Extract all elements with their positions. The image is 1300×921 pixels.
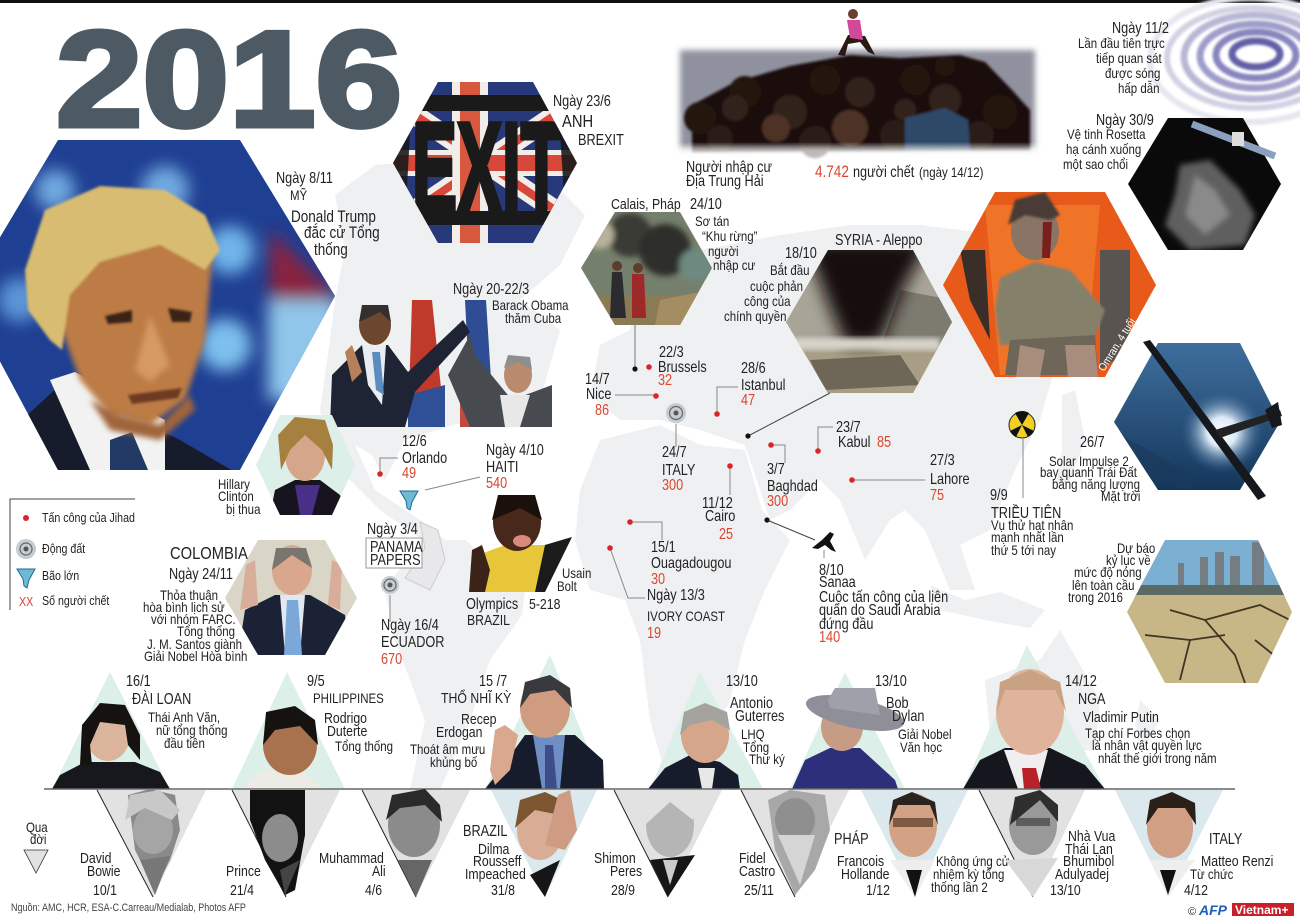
gravitational waves caption: tiếp quan sát — [1096, 50, 1162, 66]
panel: King Bhumibol triangle: Bhumibol — [1063, 853, 1114, 869]
event: Sanaa: đứng đầu — [819, 616, 873, 633]
event: Haiti storm: HAITI — [486, 459, 518, 476]
panel: migrants photo — [670, 50, 1045, 162]
legend: XX — [19, 594, 33, 609]
gravitational waves caption: được sóng — [1105, 65, 1160, 81]
event: North Korea nuclear test — [990, 411, 1073, 558]
event: Ecuador earthquake: 670 — [381, 651, 402, 668]
event: Ivory Coast — [607, 545, 725, 642]
event: Brussels: Brussels — [658, 359, 707, 376]
panel: Matteo Renzi triangle: 4/12 — [1184, 882, 1208, 898]
panel: Putin triangle: NGA — [1078, 691, 1106, 708]
event: Haiti storm: Ngày 4/10 — [486, 442, 544, 459]
event: North Korea nuclear test: TRIỀU TIÊN — [991, 504, 1061, 522]
Bolt captions: Olympics — [466, 596, 518, 613]
panel: Calais photo — [581, 212, 712, 325]
panel: Trump photo — [0, 140, 340, 475]
panel: Erdogan triangle: Thoát âm mưu — [410, 741, 485, 757]
panel: King Bhumibol triangle: 13/10 — [1050, 882, 1081, 898]
panel: Guterres triangle: LHQ — [741, 726, 765, 742]
event: Panama Papers: PANAMA — [370, 539, 423, 556]
panel: Omran photo — [943, 192, 1156, 377]
child held up — [838, 9, 875, 56]
Rosetta caption: Ngày 30/9 — [1096, 112, 1154, 129]
Bolt captions: Bolt — [557, 578, 577, 594]
Obama caption: thăm Cuba — [505, 310, 562, 326]
event: Sanaa: 8/10 — [819, 562, 844, 579]
panel: Clinton photo — [256, 415, 355, 515]
panel: Guterres triangle: Thư ký — [749, 751, 785, 767]
Bolt captions: 5-218 — [529, 596, 561, 612]
drought caption: mức độ nóng — [1074, 564, 1142, 580]
panel: Fidel Castro triangle: 25/11 — [744, 882, 774, 898]
timeline divider — [44, 788, 1235, 790]
panel: Francois Hollande triangle: Hollande — [841, 866, 890, 882]
Aleppo caption: SYRIA - Aleppo — [835, 232, 923, 249]
event: Baghdad: Baghdad — [767, 478, 818, 495]
panel: King Bhumibol triangle: Thái Lan — [1065, 841, 1113, 857]
event: North Korea nuclear test: thứ 5 tới nay — [991, 542, 1057, 558]
panel: Duterte triangle — [232, 672, 393, 789]
event: Nice: Nice — [586, 386, 612, 403]
Colombia caption: với nhóm FARC. — [151, 611, 236, 627]
Clinton caption: Hillary — [218, 476, 250, 492]
panel: Francois Hollande triangle: 1/12 — [866, 882, 890, 898]
event: Cairo: Cairo — [705, 508, 735, 525]
event: Calais marker — [632, 325, 638, 372]
event: Haiti storm: 540 — [486, 475, 507, 492]
Calais caption: Calais, Pháp — [611, 196, 681, 212]
Colombia caption: hòa bình lịch sử — [143, 599, 225, 615]
Rosetta satellite — [1192, 124, 1275, 156]
panel: Erdogan triangle: khủng bố — [430, 754, 477, 770]
panel: Solar Impulse photo — [1114, 343, 1280, 490]
event: Lahore: 27/3 — [930, 452, 955, 469]
legend: Số người chết — [42, 593, 110, 608]
panel: Guterres triangle: Tổng — [743, 739, 769, 755]
Solar Impulse caption — [1040, 434, 1140, 504]
event: Sanaa: quân do Saudi Arabia — [819, 602, 941, 619]
Aleppo leader line — [745, 393, 830, 439]
event: Lahore: 75 — [930, 487, 944, 504]
Calais caption: nhập cư — [713, 257, 756, 273]
gravitational waves caption — [1078, 20, 1169, 96]
panel: Shimon Peres triangle: 28/9 — [611, 882, 635, 898]
panel: Duterte triangle: PHILIPPINES — [313, 690, 384, 706]
event: Sanaa — [764, 517, 948, 646]
event: Istanbul — [714, 360, 785, 417]
panel: Duterte triangle: 9/5 — [307, 673, 325, 690]
Trump caption: Donald Trump — [291, 208, 376, 226]
Trump caption: Ngày 8/11 — [276, 170, 333, 187]
Brexit caption: Ngày 23/6 — [553, 93, 611, 110]
event: Panama Papers: PAPERS — [370, 552, 421, 569]
panel: Usain Bolt photo — [469, 493, 572, 592]
event: Panama Papers — [366, 521, 445, 590]
event: Italy earthquake — [662, 403, 696, 494]
Aleppo caption: 18/10 — [785, 245, 817, 262]
event: North Korea nuclear test: 9/9 — [990, 487, 1008, 504]
Obama caption — [453, 281, 569, 326]
panel: Bob Dylan triangle: Dylan — [892, 708, 924, 725]
Obama caption: Ngày 20-22/3 — [453, 281, 529, 298]
panel: Francois Hollande triangle: PHÁP — [834, 830, 869, 848]
event: Istanbul: Istanbul — [741, 377, 785, 394]
panel: Shimon Peres triangle: Shimon — [594, 850, 636, 866]
panel: Tsai Ing-wen triangle: đầu tiên — [164, 735, 205, 751]
panel: Putin triangle: 14/12 — [1065, 673, 1097, 690]
Bolt captions: Usain — [562, 565, 591, 581]
panel: Dilma Rousseff triangle — [463, 790, 597, 898]
panel: Aleppo photo — [786, 240, 952, 393]
Colombia caption: Tổng thống — [177, 623, 235, 639]
panel: David Bowie triangle: Bowie — [87, 863, 121, 879]
event: Orlando: 49 — [402, 465, 416, 482]
Colombia caption: J. M. Santos giành — [147, 636, 242, 652]
event: Ecuador earthquake: ECUADOR — [381, 634, 444, 651]
panel: David Bowie triangle: 10/1 — [93, 882, 117, 898]
event: Istanbul: 28/6 — [741, 360, 766, 377]
panel: Rosetta photo — [1128, 118, 1281, 250]
event: Orlando — [377, 433, 447, 482]
Clinton caption — [218, 476, 261, 517]
panel: Duterte triangle: Tổng thống — [335, 738, 393, 754]
panel: David Bowie triangle — [80, 789, 206, 898]
Obama caption: Barack Obama — [492, 297, 569, 313]
panel: Bob Dylan triangle: 13/10 — [875, 673, 907, 690]
Bolt captions: BRAZIL — [467, 612, 510, 628]
migrants death toll: 4.742 — [815, 163, 849, 181]
legend: Tấn công của Jihad — [42, 510, 135, 525]
event: Ouagadougou: Ouagadougou — [651, 555, 731, 572]
credits: AFP and Vietnam+ — [1188, 902, 1294, 918]
Clinton caption: bị thua — [226, 501, 261, 517]
panel: gravitational waves — [1150, 0, 1300, 122]
event: Ivory Coast: Ngày 13/3 — [647, 587, 705, 604]
panel: Muhammad Ali triangle: 4/6 — [365, 882, 382, 898]
title: 2016 — [56, 3, 402, 155]
event: Italy earthquake: ITALY — [662, 462, 696, 479]
passed away legend — [24, 819, 48, 873]
panel: King Bhumibol triangle: Adulyadej — [1055, 866, 1109, 882]
panel: Guterres triangle: Guterres — [735, 708, 784, 725]
panel: Guterres triangle — [648, 672, 785, 789]
panel: Brexit photo: EXIT — [412, 97, 562, 240]
Brexit caption: BREXIT — [578, 132, 624, 149]
event: Brussels: 32 — [658, 372, 672, 389]
Solar Impulse caption: Solar Impulse 2 — [1049, 453, 1129, 469]
panel: Putin triangle: Tạp chí Forbes chọn — [1085, 725, 1190, 741]
panel: Guterres triangle: Antonio — [730, 695, 773, 712]
event: Brussels: 22/3 — [659, 344, 684, 361]
panel: Francois Hollande triangle: Francois — [837, 853, 884, 869]
migrants death toll: người chết — [853, 164, 914, 181]
panel: Bob Dylan triangle: Giải Nobel — [898, 726, 952, 742]
solar plane — [1143, 340, 1282, 500]
panel: Muhammad Ali triangle: Ali — [372, 863, 386, 879]
panel: Matteo Renzi triangle: ITALY — [1209, 831, 1243, 848]
panel: Francois Hollande triangle: thống lần 2 — [931, 879, 988, 895]
panel: Putin triangle: Vladimir Putin — [1083, 709, 1159, 725]
Colombia caption: Ngày 24/11 — [169, 566, 233, 583]
event: Kabul: Kabul — [838, 434, 870, 451]
legend — [10, 499, 135, 610]
panel: Fidel Castro triangle — [739, 790, 849, 898]
migrants caption: Người nhập cư — [686, 159, 772, 176]
panel: Fidel Castro triangle: Fidel — [739, 850, 766, 866]
gravitational waves caption: hấp dẫn — [1118, 80, 1159, 96]
event: Orlando: Orlando — [402, 450, 447, 467]
panel: Duterte triangle: Duterte — [327, 723, 368, 739]
drought caption — [1068, 540, 1155, 605]
Aleppo caption: chính quyền — [724, 308, 787, 324]
migrants caption — [686, 159, 772, 190]
credits: AFP and Vietnam+: AFP — [1198, 902, 1228, 918]
panel: Dilma Rousseff triangle: Dilma — [478, 841, 510, 857]
Aleppo caption: Bắt đầu — [770, 262, 810, 278]
panel: Tsai Ing-wen triangle: nữ tổng thống — [156, 722, 227, 738]
Solar Impulse caption: 26/7 — [1080, 434, 1105, 451]
panel: Tsai Ing-wen triangle: Thái Anh Văn, — [148, 709, 220, 725]
panel: Prince triangle — [226, 790, 340, 898]
event: Sanaa: Cuộc tấn công của liên — [819, 589, 948, 606]
panel: Muhammad Ali triangle — [319, 789, 470, 898]
panel: Muhammad Ali triangle: Muhammad — [319, 850, 384, 866]
panel: Dilma Rousseff triangle: Impeached — [465, 866, 526, 882]
drought caption: lên toàn cầu — [1072, 577, 1135, 593]
panel: King Bhumibol triangle — [979, 790, 1116, 898]
Bolt captions — [466, 565, 591, 628]
Trump caption — [276, 170, 380, 259]
event: Kabul: 23/7 — [836, 419, 861, 436]
event: Ouagadougou: 30 — [651, 571, 665, 588]
Calais caption — [611, 196, 758, 273]
drought caption: kỷ lục về — [1106, 552, 1151, 568]
panel: Erdogan triangle: 15 /7 — [479, 673, 507, 690]
event: Baghdad — [767, 442, 818, 510]
credits: AFP and Vietnam+: Vietnam+ — [1235, 903, 1288, 917]
event: Lahore: Lahore — [930, 471, 970, 488]
panel: Fidel Castro triangle: Castro — [739, 863, 776, 879]
source note: Nguồn: AMC, HCR, ESA-C.Carreau/Medialab, Photos AFP — [11, 901, 246, 914]
event: Ivory Coast: IVORY COAST — [647, 608, 725, 624]
panel: Prince triangle: 21/4 — [230, 882, 254, 898]
panel: Putin triangle: là nhân vật quyền lực — [1092, 737, 1202, 753]
panel: Putin triangle: nhất thế giới trong năm — [1098, 750, 1217, 766]
event: Ouagadougou — [627, 519, 731, 588]
credits: AFP and Vietnam+: © — [1188, 906, 1196, 918]
event: Haiti storm — [400, 442, 544, 510]
Trump caption: MỸ — [290, 187, 308, 203]
event: Baghdad: 3/7 — [767, 461, 785, 478]
panel: Brexit photo — [393, 82, 577, 243]
event: Italy earthquake: 24/7 — [662, 444, 687, 461]
event: Nice: 14/7 — [585, 371, 610, 388]
Aleppo caption: công của — [744, 293, 791, 309]
event: Sanaa: 140 — [819, 629, 840, 646]
event: Kabul — [815, 419, 891, 454]
Colombia caption: Giải Nobel Hòa bình — [144, 648, 247, 664]
panel: drought photo — [1127, 540, 1292, 685]
panel: Putin triangle — [963, 645, 1217, 789]
Trump caption: thống — [314, 241, 348, 259]
event: Cairo — [702, 463, 735, 543]
drought caption: trong 2016 — [1068, 589, 1123, 605]
migrants caption: Địa Trung Hải — [686, 173, 764, 190]
event: Kabul: 85 — [877, 434, 891, 451]
panel: Erdogan triangle: Recep — [461, 711, 497, 727]
event: Ecuador earthquake — [381, 576, 444, 668]
panel: Bob Dylan triangle: Bob — [886, 695, 909, 712]
panel: Francois Hollande triangle: nhiệm kỳ tổng — [933, 866, 1004, 882]
panel: Omran photo: Omran, 4 tuổi — [1096, 316, 1138, 374]
Solar Impulse caption: Mặt trời — [1101, 488, 1140, 504]
panel: David Bowie triangle: David — [80, 850, 111, 866]
event: Sanaa: Sanaa — [819, 574, 856, 591]
panel: Francois Hollande triangle — [834, 790, 1010, 898]
event: Brussels — [646, 344, 707, 389]
Clinton caption: Clinton — [218, 488, 254, 504]
event: Ivory Coast: 19 — [647, 625, 661, 642]
Colombia caption — [143, 544, 248, 664]
event: Orlando: 12/6 — [402, 433, 427, 450]
event: Cairo: 25 — [719, 526, 733, 543]
event: Italy earthquake: 300 — [662, 477, 683, 494]
event: Istanbul: 47 — [741, 392, 755, 409]
Brexit caption — [553, 93, 624, 149]
panel: Matteo Renzi triangle — [1115, 790, 1273, 898]
event: Baghdad: 300 — [767, 493, 788, 510]
legend: Bão lớn — [42, 568, 79, 583]
panel: Matteo Renzi triangle: Matteo Renzi — [1201, 853, 1273, 869]
panel: King Bhumibol triangle: Nhà Vua — [1068, 828, 1116, 844]
panel: Erdogan triangle: THỔ NHĨ KỲ — [441, 688, 511, 706]
Trump caption: đắc cử Tổng — [304, 224, 380, 242]
gravitational waves caption: Ngày 11/2 — [1112, 20, 1169, 37]
event: Cairo: 11/12 — [702, 495, 733, 512]
Colombia caption: Thỏa thuận — [160, 587, 218, 603]
panel: Tsai Ing-wen triangle: ĐÀI LOAN — [132, 690, 191, 708]
Rosetta caption: hạ cánh xuống — [1066, 141, 1141, 157]
panel: Obama and Castro photo — [330, 300, 552, 427]
panel: Francois Hollande triangle: Không ứng cử — [936, 853, 1010, 869]
panel: Bob Dylan triangle: Văn học — [900, 739, 943, 755]
panel: Prince triangle: Prince — [226, 863, 261, 879]
Colombia caption: COLOMBIA — [170, 544, 248, 563]
panel: Bob Dylan triangle — [790, 672, 952, 789]
Calais caption: Sơ tán — [695, 213, 729, 229]
Aleppo caption: cuộc phản — [750, 278, 803, 294]
panel: Santos photo — [225, 540, 357, 655]
Solar Impulse caption: bay quanh Trái Đất — [1040, 464, 1137, 480]
migrants death toll — [815, 163, 983, 181]
Calais caption: 24/10 — [690, 196, 722, 213]
event: Panama Papers: Ngày 3/4 — [367, 521, 418, 538]
event: Nice — [585, 371, 659, 419]
event: North Korea nuclear test: Vụ thử hạt nhân — [991, 517, 1073, 533]
panel: Dilma Rousseff triangle: Rousseff — [473, 853, 521, 869]
panel: Tsai Ing-wen triangle — [52, 672, 227, 789]
panel: Matteo Renzi triangle: Từ chức — [1190, 866, 1234, 882]
gravitational waves caption: Lần đầu tiên trực — [1078, 35, 1165, 51]
panel: Erdogan triangle: Erdogan — [436, 724, 482, 740]
Rosetta caption: Vệ tinh Rosetta — [1067, 126, 1146, 142]
panel: Erdogan triangle — [410, 655, 605, 789]
top black bar — [0, 0, 1300, 3]
drought caption: Dự báo — [1117, 540, 1155, 556]
panel: Dilma Rousseff triangle: 31/8 — [491, 882, 515, 898]
Calais caption: “Khu rừng” — [702, 228, 758, 244]
Solar Impulse caption: bằng năng lượng — [1052, 476, 1140, 492]
event: Lahore — [849, 452, 970, 504]
migrants death toll: (ngày 14/12) — [919, 164, 983, 180]
legend: Động đất — [42, 541, 86, 556]
Brexit caption: ANH — [562, 112, 593, 131]
Aleppo caption — [724, 232, 923, 324]
passed away legend: đời — [30, 831, 46, 847]
Calais caption: người — [708, 243, 739, 259]
Rosetta caption: một sao chổi — [1063, 156, 1128, 172]
panel: Dilma Rousseff triangle: BRAZIL — [463, 823, 508, 840]
panel: Duterte triangle: Rodrigo — [324, 710, 367, 726]
panel: Tsai Ing-wen triangle: 16/1 — [126, 673, 151, 690]
panel: Shimon Peres triangle — [594, 790, 722, 898]
passed away legend: Qua — [26, 819, 48, 835]
event: North Korea nuclear test: mạnh nhất lần — [991, 529, 1064, 545]
event: Nice: 86 — [595, 402, 609, 419]
world map — [320, 160, 1160, 790]
panel: Guterres triangle: 13/10 — [726, 673, 758, 690]
panel: Shimon Peres triangle: Peres — [610, 863, 642, 879]
event: Ecuador earthquake: Ngày 16/4 — [381, 617, 439, 634]
Rosetta caption — [1063, 112, 1154, 172]
event: Ouagadougou: 15/1 — [651, 539, 676, 556]
